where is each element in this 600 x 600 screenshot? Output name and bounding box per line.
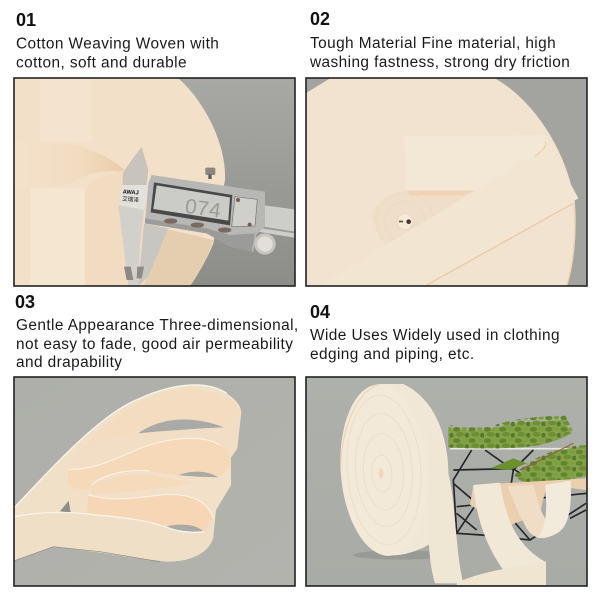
hole 2 xyxy=(178,472,218,478)
text: cotton weaving: Cotton Weaving Woven with xyxy=(16,36,219,52)
caliper jaws xyxy=(123,147,148,185)
panel: tape roll photo xyxy=(306,78,587,286)
digital display xyxy=(151,182,232,225)
text: gentle appearance: Gentle Appearance Three-dimensional, xyxy=(16,317,299,334)
heading: 02: 02 xyxy=(310,9,330,29)
hole 1 xyxy=(138,420,224,433)
middle band xyxy=(140,430,238,458)
lower loop band xyxy=(106,471,231,510)
hole 3 xyxy=(165,525,203,532)
back ribbon inner surface xyxy=(70,389,241,463)
panel: caliper photo: 艾瑞泽 xyxy=(122,195,140,204)
front ribbon xyxy=(82,536,214,562)
ribbon silhouette xyxy=(15,385,241,562)
heading: 02 xyxy=(309,9,570,71)
hanging tape xyxy=(429,474,462,584)
gap under strip xyxy=(60,501,71,513)
text: cotton weaving: cotton, soft and durable xyxy=(16,54,187,72)
panel: caliper photo: AWAJ xyxy=(123,189,139,196)
lower loop inner xyxy=(87,495,213,532)
middle loop inner xyxy=(68,439,231,490)
heading: 01: 01 xyxy=(16,10,36,30)
heading: 03: 03 xyxy=(15,292,35,312)
tape on basket xyxy=(470,478,586,527)
caliper body xyxy=(145,175,265,252)
roll face xyxy=(307,78,576,286)
text: gentle appearance: not easy to fade, good air permeability xyxy=(16,336,293,353)
shadow xyxy=(354,550,430,560)
text: wide uses: Wide Uses Widely used in clothing xyxy=(310,327,560,344)
roll rim xyxy=(377,384,449,555)
plant xyxy=(448,415,586,484)
heading: 01 xyxy=(16,10,219,72)
text: wide uses: edging and piping, etc. xyxy=(310,346,475,363)
text: tough material: Tough Material Fine material, high xyxy=(310,35,556,52)
text: tough material: washing fastness, strong dry friction xyxy=(309,54,570,71)
tape bottom curl xyxy=(457,562,546,585)
roll face xyxy=(340,384,394,556)
roll centre xyxy=(372,191,467,243)
panel: caliper photo: 074 xyxy=(184,195,223,223)
heading: 03 xyxy=(15,292,299,371)
heading: 04: 04 xyxy=(310,302,330,322)
heading: 04 xyxy=(310,302,560,363)
panel: caliper photo xyxy=(13,78,295,286)
folded tape xyxy=(404,135,550,192)
tape roll disc xyxy=(13,78,225,286)
ruler xyxy=(257,205,295,238)
wire basket xyxy=(453,450,587,540)
text: gentle appearance: and drapability xyxy=(16,354,122,371)
panel: usage photo xyxy=(306,377,587,586)
thumb wheel xyxy=(254,233,276,255)
main tape band xyxy=(388,184,578,250)
panel: loose ribbon photo xyxy=(14,377,295,586)
